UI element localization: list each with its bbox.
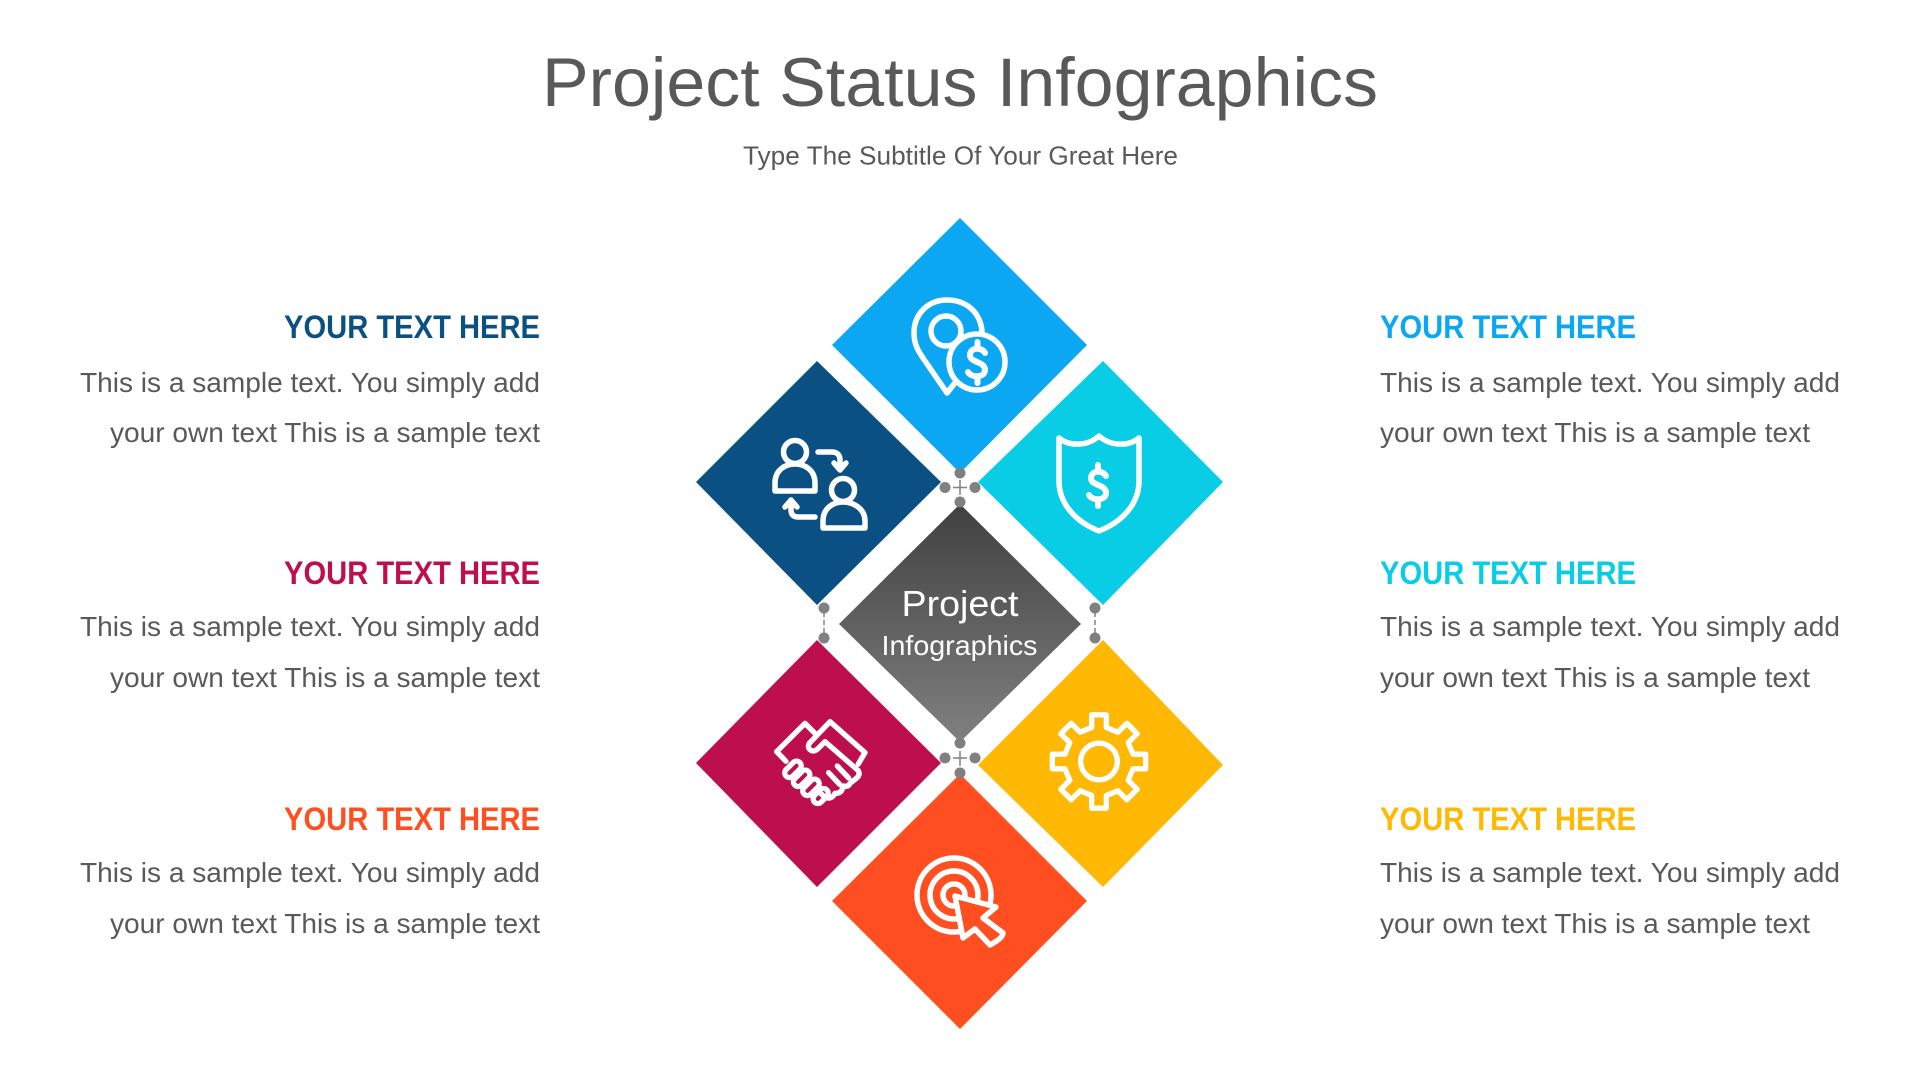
subtitle: Type The Subtitle Of Your Great Here <box>743 140 1178 170</box>
icon: handshake <box>777 722 865 805</box>
icon: target with cursor <box>917 858 1003 945</box>
center label: Project <box>902 583 1018 624</box>
icon: shield with dollar <box>1059 436 1139 531</box>
diamond: left navy <box>696 361 941 605</box>
center label <box>882 583 1038 661</box>
text block: left middle: This is a sample text. You simply add <box>80 611 540 642</box>
text block: right bottom <box>1380 801 1840 939</box>
text block: right middle: This is a sample text. You simply add <box>1380 611 1840 642</box>
center label: Infographics <box>882 630 1038 661</box>
text block: right middle: your own text This is a sample text <box>1380 662 1810 693</box>
text block: left top: your own text This is a sample text <box>110 417 540 448</box>
text block: left middle: YOUR TEXT HERE <box>284 555 540 591</box>
diamond: top blue <box>832 218 1087 473</box>
diamond: lower right amber <box>978 640 1223 887</box>
icon: people exchange <box>775 440 865 528</box>
text block: right bottom: This is a sample text. You simply add <box>1380 857 1840 888</box>
text block: right top <box>1380 309 1840 448</box>
text block: left top: YOUR TEXT HERE <box>284 309 540 345</box>
text block: left top: This is a sample text. You simply add <box>80 367 540 398</box>
text block: left middle: your own text This is a sample text <box>110 662 540 693</box>
connector: upper center <box>940 468 980 508</box>
text block: right bottom: your own text This is a sample text <box>1380 908 1810 939</box>
diamond: bottom orange <box>832 774 1087 1029</box>
text block: left bottom: This is a sample text. You simply add <box>80 857 540 888</box>
text block: left middle <box>80 555 540 693</box>
connector: lower center <box>940 738 980 778</box>
text block: left top <box>80 309 540 448</box>
text block: right middle: YOUR TEXT HERE <box>1380 555 1636 591</box>
title: Project Status Infographics <box>542 44 1378 121</box>
text block: right top: YOUR TEXT HERE <box>1380 309 1636 345</box>
diamond: right cyan <box>978 361 1223 605</box>
icon: location pin with dollar <box>914 300 1005 393</box>
text block: left bottom: YOUR TEXT HERE <box>284 801 540 837</box>
text block: right middle <box>1380 555 1840 693</box>
diamond: center grey <box>839 504 1081 742</box>
text block: right bottom: YOUR TEXT HERE <box>1380 801 1636 837</box>
connector: right <box>1090 602 1100 644</box>
diamond: lower left crimson <box>696 640 941 887</box>
text block: right top: This is a sample text. You simply add <box>1380 367 1840 398</box>
text block: right top: your own text This is a sample text <box>1380 417 1810 448</box>
text block: left bottom <box>80 801 540 939</box>
icon: gear <box>1052 715 1146 808</box>
connector: left <box>818 602 830 644</box>
text block: left bottom: your own text This is a sample text <box>110 908 540 939</box>
